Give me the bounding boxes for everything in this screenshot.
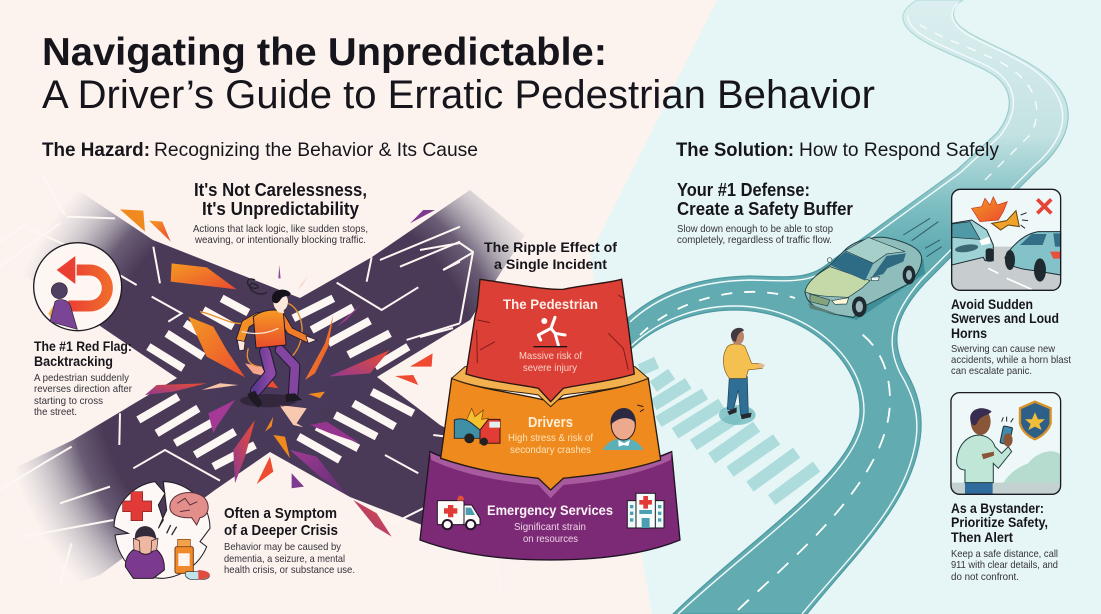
explosion — [972, 197, 1007, 222]
text: as a bystander: Then Alert — [951, 529, 1013, 545]
text: not carelessness: It's Not Carelessness, — [194, 180, 367, 200]
horn — [992, 211, 1019, 230]
text: symptom of deeper crisis: Behavior may be caused by — [224, 541, 342, 553]
text: symptom of deeper crisis: dementia, a seizure, a mental — [224, 553, 345, 565]
title — [42, 31, 875, 117]
icon: worried driver — [603, 405, 644, 450]
text: safety buffer: Slow down enough to be able to stop — [677, 223, 833, 235]
text: symptom of deeper crisis — [224, 505, 355, 576]
icon: hospital — [627, 493, 664, 528]
text: symptom of deeper crisis: health crisis, or substance use. — [224, 564, 355, 576]
figure: car — [805, 218, 942, 320]
text: pedestrian tier: Massive risk of — [519, 350, 582, 362]
icon: crash — [454, 408, 500, 446]
text: pedestrian tier: The Pedestrian — [503, 296, 598, 312]
shards: exploding fragments — [120, 209, 435, 537]
text: pedestrian tier: severe injury — [523, 362, 578, 374]
text: not carelessness: It's Unpredictability — [202, 199, 359, 219]
icon: slipping figure — [534, 317, 567, 347]
text: as a bystander: Prioritize Safety, — [951, 514, 1048, 530]
icon: deeper crisis circle — [114, 482, 210, 579]
text: emergency services tier: on resources — [523, 533, 578, 545]
text: not carelessness: Actions that lack logic, like sudden stops, — [193, 223, 368, 235]
text: emergency services tier: Significant strain — [514, 521, 586, 533]
x mark — [1037, 199, 1051, 213]
tier: drivers — [441, 367, 661, 490]
text: avoid swerves: can escalate panic. — [951, 365, 1032, 377]
heading: the hazard: Recognizing the Behavior & Its Cause — [154, 139, 478, 161]
text: avoid swerves: Avoid Sudden — [951, 296, 1033, 312]
text: emergency services tier: Emergency Services — [487, 502, 613, 518]
text: as a bystander — [951, 500, 1058, 583]
right car — [1005, 232, 1061, 275]
text: symptom of deeper crisis: of a Deeper Crisis — [224, 522, 338, 539]
heading: the solution: The Solution: — [676, 139, 794, 161]
text: red flag backtracking: reverses direction after — [34, 383, 132, 395]
text: avoid swerves: Swerves and Loud — [951, 310, 1059, 326]
text: red flag backtracking: the street. — [34, 406, 77, 418]
text: avoid swerves: Horns — [951, 325, 987, 341]
text: safety buffer: Create a Safety Buffer — [677, 199, 853, 219]
text: emergency services tier — [487, 502, 613, 545]
text: red flag backtracking: starting to cross — [34, 395, 103, 407]
figure: calm pedestrian — [719, 328, 765, 425]
text: ripple effect heading — [484, 239, 617, 272]
title: Navigating the Unpredictable: — [42, 31, 607, 74]
text: as a bystander: 911 with clear details, and — [951, 559, 1058, 571]
text: drivers tier: Drivers — [528, 415, 573, 431]
text: as a bystander: As a Bystander: — [951, 500, 1044, 516]
text: as a bystander: Keep a safe distance, call — [951, 548, 1058, 560]
text: drivers tier — [508, 415, 593, 456]
pyramid: ripple effect tiers — [420, 279, 680, 560]
text: drivers tier: High stress & risk of — [508, 432, 593, 444]
road: shattered intersection — [0, 160, 525, 590]
text: red flag backtracking: A pedestrian suddenly — [34, 372, 130, 384]
text: not carelessness: weaving, or intentionally blocking traffic. — [194, 234, 366, 246]
text: pedestrian tier — [503, 296, 598, 374]
text: red flag backtracking: Backtracking — [34, 353, 113, 369]
road: winding solution road — [628, 0, 1068, 614]
panel: avoid swerves image — [952, 189, 1061, 290]
heading: the hazard: The Hazard: — [42, 139, 150, 161]
icon: ambulance — [437, 496, 480, 529]
figure: erratic pedestrian — [200, 279, 317, 408]
heading: the solution — [676, 139, 999, 161]
teal crosswalk — [640, 363, 817, 500]
text: safety buffer: Your #1 Defense: — [677, 180, 810, 200]
text: symptom of deeper crisis: Often a Symptom — [224, 505, 337, 522]
text: red flag backtracking — [34, 338, 132, 418]
person — [965, 482, 993, 494]
text: avoid swerves: Swerving can cause new — [951, 343, 1055, 355]
text: red flag backtracking: The #1 Red Flag: — [34, 338, 132, 354]
text: avoid swerves: accidents, while a horn blast — [951, 354, 1071, 366]
text: not carelessness — [193, 180, 368, 246]
text: avoid swerves — [951, 296, 1071, 377]
panel: bystander image — [951, 393, 1061, 494]
heading: the solution: How to Respond Safely — [799, 139, 999, 161]
crosswalk stripes — [138, 298, 413, 467]
text: ripple effect heading: The Ripple Effect of — [484, 239, 617, 255]
text: drivers tier: secondary crashes — [510, 444, 591, 456]
tier: emergency services — [420, 452, 680, 560]
text: as a bystander: do not confront. — [951, 571, 1019, 583]
text: safety buffer — [677, 180, 853, 246]
title: A Driver’s Guide to Erratic Pedestrian Behavior — [42, 73, 875, 117]
text: ripple effect heading: a Single Incident — [494, 256, 607, 272]
tier: the pedestrian — [466, 279, 634, 402]
text: safety buffer: completely, regardless of traffic flow. — [677, 234, 832, 246]
icon: backtracking u-turn circle — [34, 243, 122, 331]
shield — [1020, 402, 1051, 439]
left car — [952, 220, 993, 265]
